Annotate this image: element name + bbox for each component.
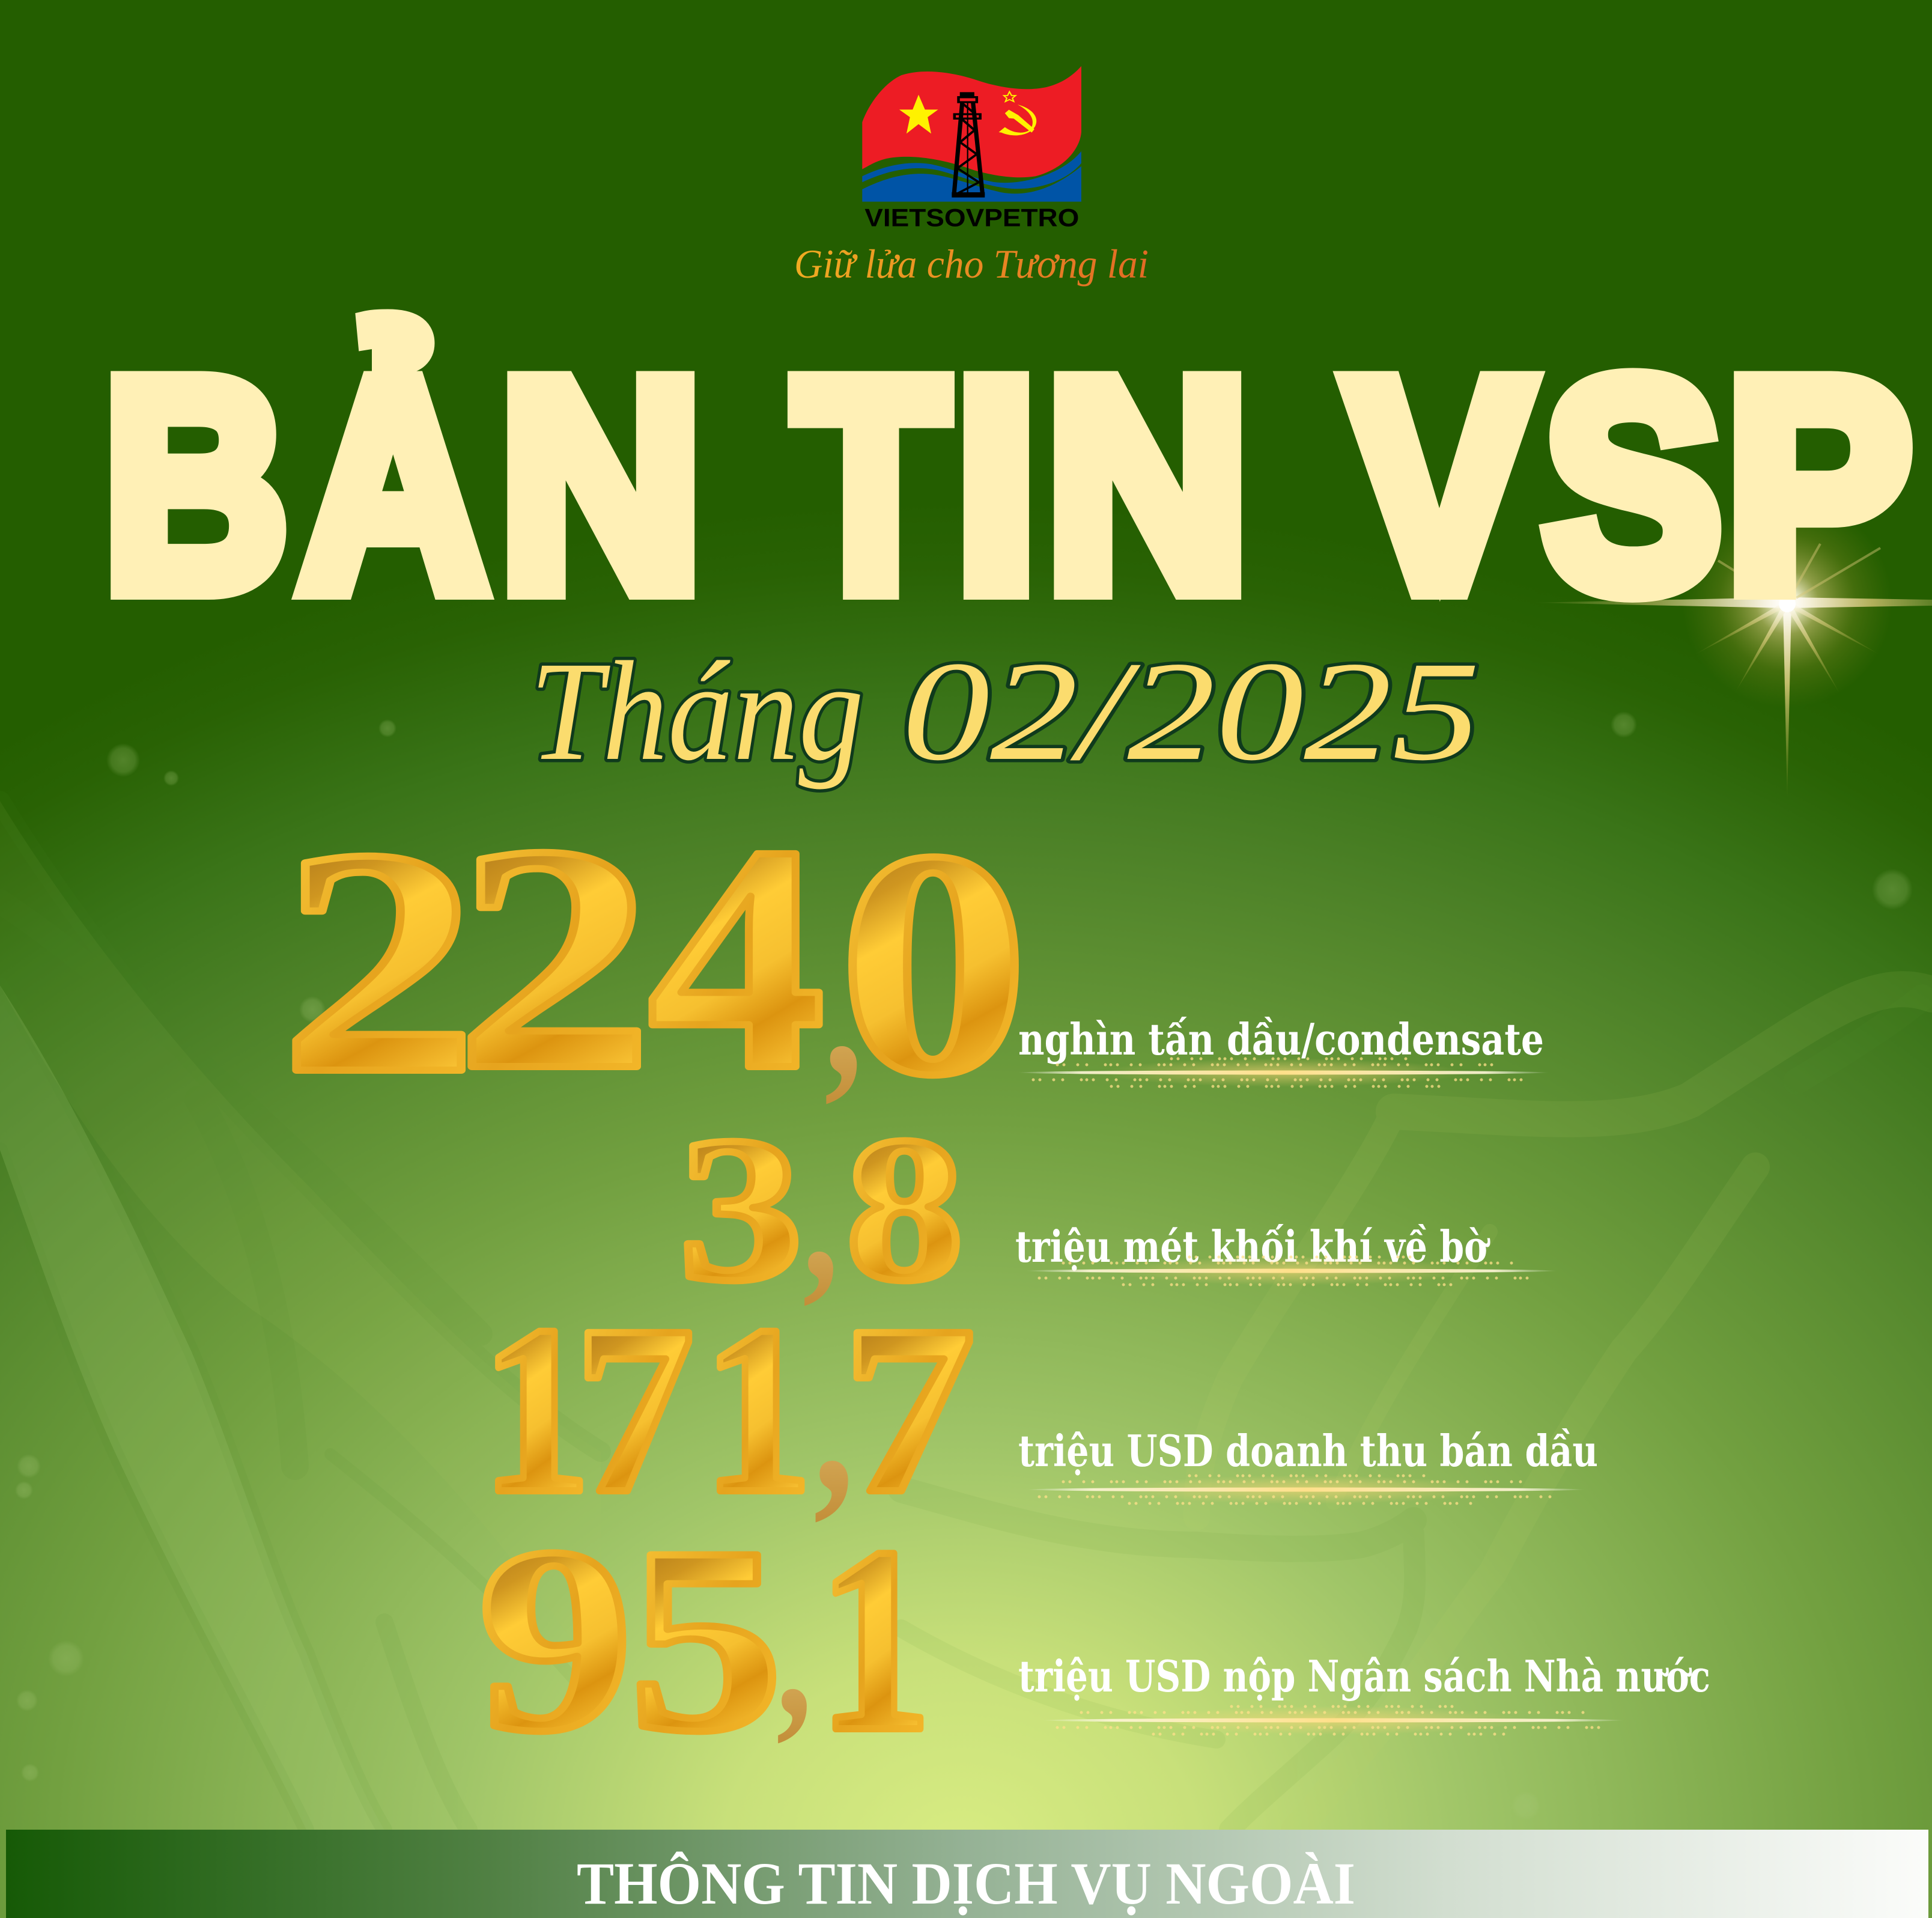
title: BẢN TIN VSP: N	[500, 318, 702, 651]
logo flag red	[862, 66, 1081, 177]
title: BẢN TIN VSP: P	[1727, 319, 1911, 651]
figure: 224,0: 2	[280, 783, 478, 1140]
figure: 3,8: 3	[679, 1094, 803, 1324]
title: BẢN TIN VSP: S	[1544, 319, 1721, 651]
title: BẢN TIN VSP: I	[956, 318, 1037, 651]
comma: 171,7: ,	[813, 1309, 854, 1535]
title: BẢN TIN VSP: V	[1347, 319, 1533, 651]
figure: 224,0: 4	[648, 779, 825, 1137]
label: gas: triệu mét khối khí về bờ	[1015, 1221, 1490, 1272]
subtitle: month	[530, 633, 1480, 790]
figure: 95,1: 1	[817, 1492, 932, 1786]
star flare	[1532, 498, 1932, 801]
logo oil derrick	[952, 93, 985, 195]
logo wave blue band	[862, 151, 1081, 189]
figure: 171,7: 7	[842, 1276, 976, 1543]
figure: 224,0: 0	[838, 785, 1029, 1142]
oil swirl decoration	[0, 801, 1932, 1830]
figure: 3,8	[679, 1094, 964, 1324]
figure: 224,0	[280, 779, 1029, 1142]
label: oil revenue: triệu USD doanh thu bán dầu	[1018, 1425, 1598, 1476]
figure: 95,1: 9	[478, 1492, 633, 1786]
sparkle underline 1	[1018, 1058, 1549, 1087]
title: BẢN TIN VSP	[104, 318, 1911, 651]
title: BẢN TIN VSP: Ả	[300, 318, 487, 651]
label: state budget: triệu USD nộp Ngân sách Nhà nước	[1018, 1651, 1710, 1702]
figure: 95,1	[478, 1492, 932, 1786]
logo small star	[1004, 92, 1016, 102]
figure: 171,7: 7	[574, 1276, 694, 1543]
tagline: Giữ lửa cho Tương lai	[794, 241, 1149, 287]
bokeh bubbles	[15, 711, 1913, 1820]
title: BẢN TIN VSP: B	[104, 318, 288, 651]
logo sea blue	[862, 166, 1081, 202]
logo wordmark: VIETSOVPETRO	[864, 204, 1079, 232]
figure: 224,0: 2	[455, 779, 654, 1137]
logo hammer and sickle	[998, 105, 1036, 135]
figure: 171,7: 1	[481, 1276, 591, 1543]
subtitle: month: 02/2025	[902, 633, 1480, 790]
footer heading: THÔNG TIN DỊCH VỤ NGOÀI	[577, 1850, 1355, 1917]
logo star	[899, 95, 938, 133]
title: BẢN TIN VSP: T	[795, 318, 947, 651]
title: BẢN TIN VSP: N	[1046, 318, 1249, 651]
label: oil output: nghìn tấn dầu/condensate	[1018, 1014, 1544, 1065]
sparkle underline 3	[1026, 1475, 1585, 1504]
comma: 224,0: ,	[824, 904, 863, 1116]
sparkle underline 2	[1026, 1256, 1557, 1285]
sparkle underline 4	[1042, 1706, 1624, 1735]
comma: 95,1: ,	[776, 1555, 812, 1755]
figure: 171,7	[481, 1276, 976, 1543]
figure: 171,7: 1	[702, 1276, 813, 1543]
figure: 95,1: 5	[628, 1492, 783, 1786]
footer banner	[6, 1830, 1928, 1918]
figure: 3,8: 8	[846, 1094, 964, 1324]
comma: 3,8: ,	[803, 1118, 839, 1317]
logo: Vietsovpetro	[862, 66, 1081, 232]
subtitle: month: Tháng	[530, 633, 864, 790]
